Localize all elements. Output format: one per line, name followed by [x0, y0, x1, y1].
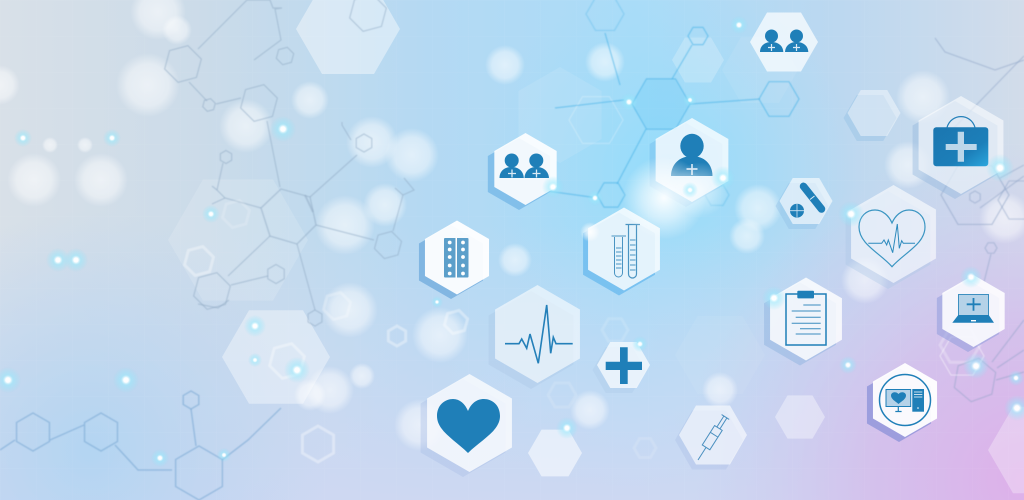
hexagon: clipboard: [764, 278, 842, 366]
hexagon: heart outline with pulse: [846, 185, 936, 289]
hexagon: test tubes: [583, 208, 660, 296]
hexagon: heart monitor computer: [867, 363, 937, 442]
molecule network: left: [162, 0, 414, 326]
hexagon: syringe: [675, 406, 747, 469]
hexagon: two medical staff (upper): [750, 13, 818, 71]
hexagon: plus: [592, 342, 650, 393]
hexagon: laptop: [937, 275, 1005, 352]
molecule network: right: [935, 38, 1024, 405]
hexagon: two medical staff (lower): [488, 133, 557, 210]
hexagon: doctor: [650, 118, 728, 207]
hexagon: ECG pulse: [489, 285, 580, 389]
soft light blooms: [580, 156, 728, 242]
molecule network: bottom left: [0, 391, 281, 500]
hexagon: solid heart: [421, 374, 512, 477]
hexagon: pill blister pack: [419, 220, 489, 299]
molecule network: centre cyan: [540, 0, 799, 207]
hexagon: medical bag: [913, 96, 1003, 199]
white ring hexagons: [183, 197, 980, 462]
hexagon: capsule and tablet: [776, 178, 832, 229]
